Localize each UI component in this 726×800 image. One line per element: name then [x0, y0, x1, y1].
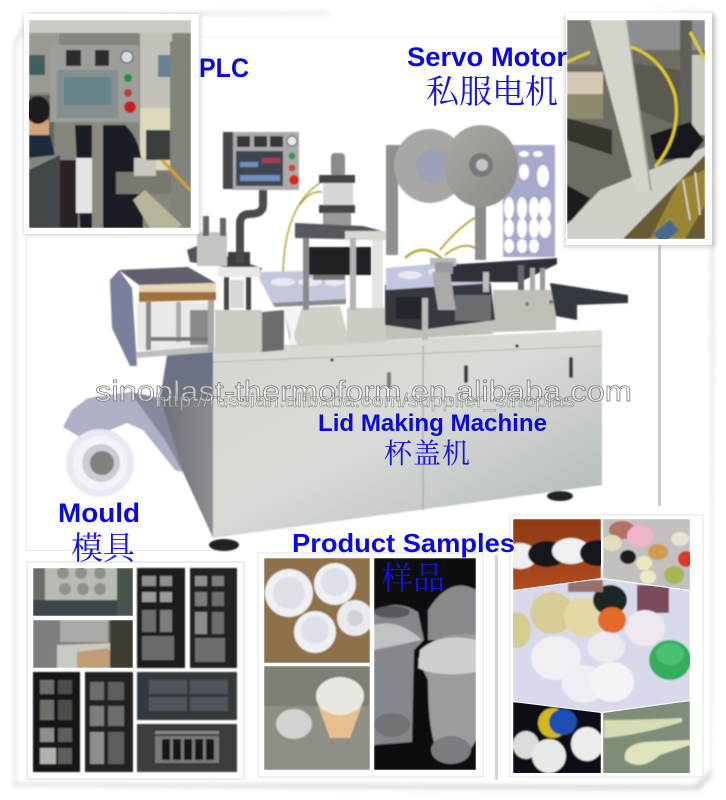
- panel: mould photos: [27, 562, 244, 779]
- central press station: [295, 153, 386, 310]
- spool frame: [386, 145, 486, 260]
- watermark: store address: sinoplast-thermoform.en.alibaba.com: [95, 376, 632, 408]
- left press station: [187, 216, 262, 310]
- feed tray with wood strip: [110, 267, 216, 366]
- panel: servo motor photo: [565, 13, 715, 247]
- photo: lids on black: [513, 702, 603, 774]
- panel: coloured lid photos: [503, 515, 703, 777]
- photos: dark mould plates: [33, 568, 237, 772]
- photo: mixed lids on grey: [602, 519, 694, 591]
- label: lid machine Chinese: 杯盖机: [384, 438, 470, 469]
- lid sheet on table: [256, 262, 492, 307]
- right station: [430, 258, 557, 310]
- panel: product sample photos: [258, 553, 483, 777]
- lower deck stations: [215, 290, 556, 354]
- photo: white lids on brown: [264, 558, 373, 663]
- cabinet handles and feet: [209, 344, 573, 551]
- cabinet front: [213, 332, 602, 538]
- film strip and roll: [63, 392, 183, 497]
- material spools: [394, 125, 518, 207]
- label: servo motor Chinese: 私服电机: [426, 73, 558, 110]
- pneumatic pipe: [240, 188, 263, 262]
- label: PLC: PLC: [199, 53, 249, 83]
- watermark: supplier url: http://russian.alibaba.com/supplier_sinoplas: [155, 391, 575, 412]
- photo: clear cups on black: [374, 558, 476, 770]
- machine illustration: [63, 125, 628, 551]
- dark guide tables: [385, 278, 628, 340]
- yellow cables: [283, 183, 485, 272]
- photo: assorted lids: [503, 579, 691, 713]
- photo: mould on machine: [33, 567, 133, 616]
- photo: mould on box: [33, 620, 133, 668]
- label: Servo Motor: Servo Motor: [407, 42, 567, 72]
- photo: lids on wood: [513, 519, 601, 590]
- label: Mould: Mould: [58, 498, 140, 528]
- photo: spoons: [603, 701, 690, 774]
- perforated plate: [503, 145, 555, 257]
- label: samples Chinese: 样品: [381, 560, 445, 596]
- label: mould Chinese: 模具: [71, 530, 137, 566]
- label: Lid Making Machine: Lid Making Machine: [318, 410, 547, 437]
- panel: PLC photo: [24, 14, 200, 235]
- label: Product Samples: Product Samples: [292, 528, 515, 558]
- photo: cup and lid on grey: [264, 666, 370, 770]
- machine stand and side wall: [160, 352, 213, 400]
- control box: [223, 132, 299, 190]
